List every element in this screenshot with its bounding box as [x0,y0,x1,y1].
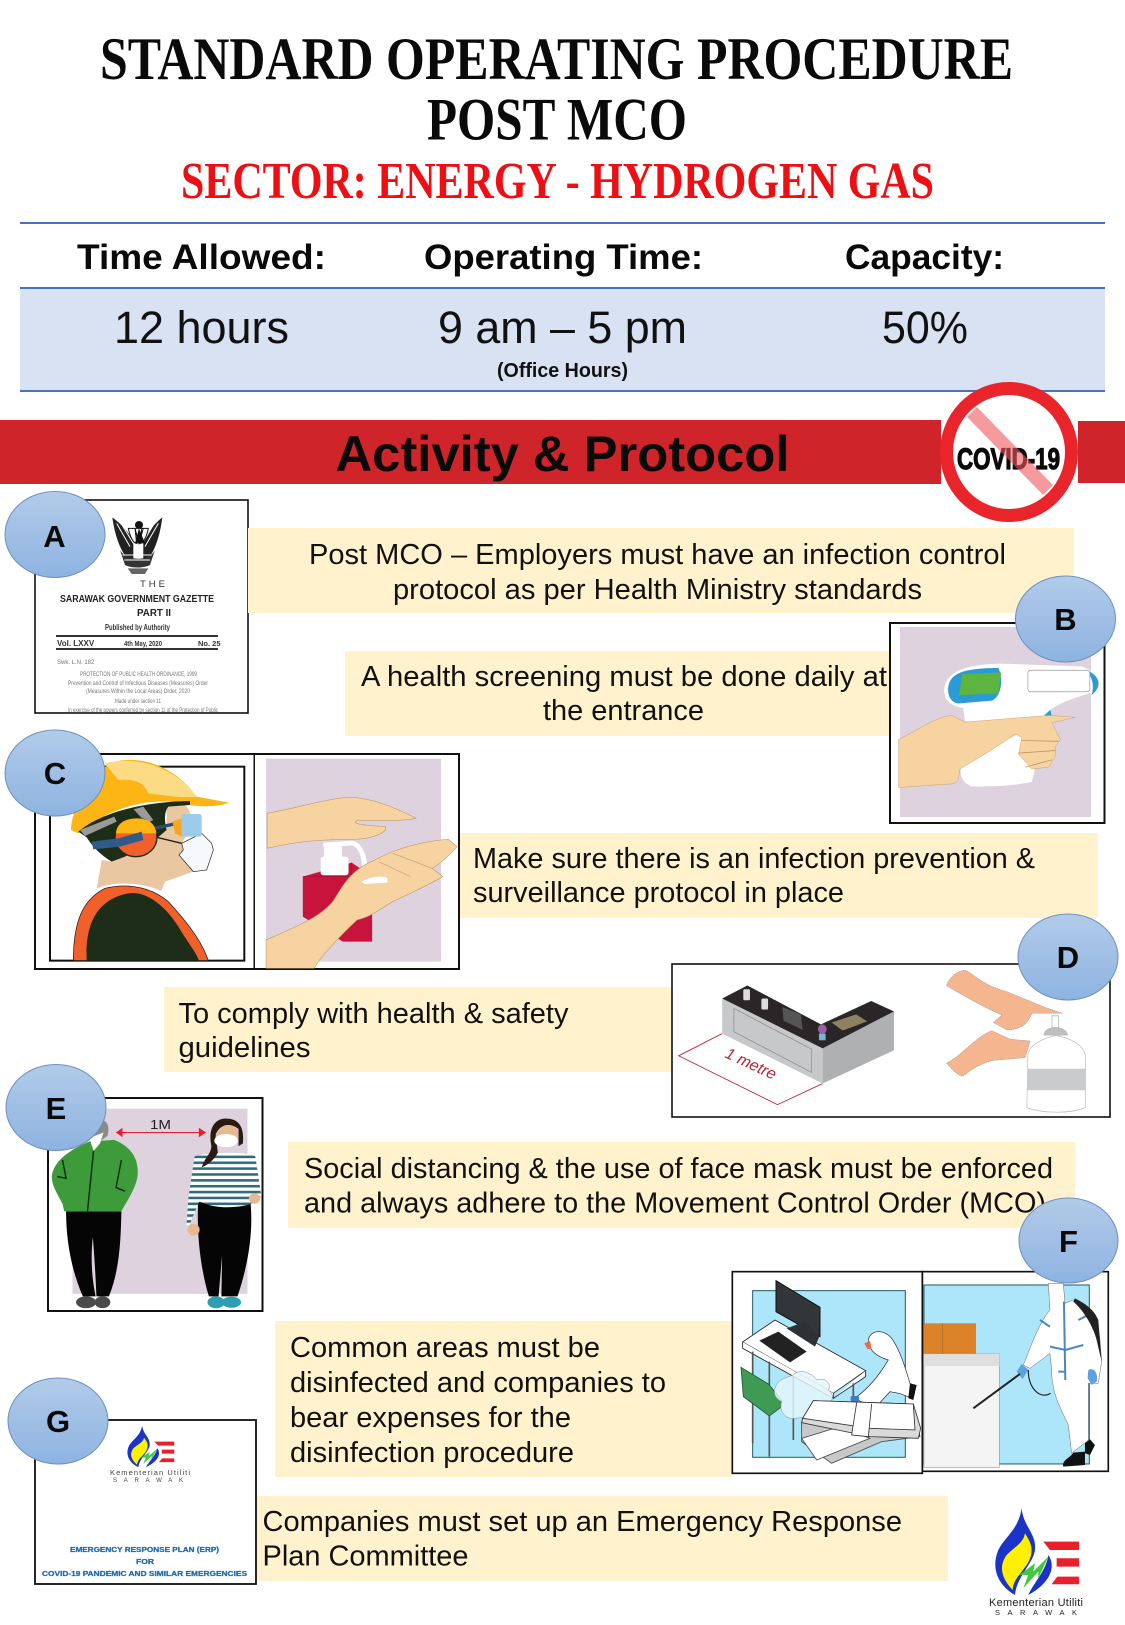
left scene [753,1291,905,1457]
badge F [1019,1198,1118,1283]
PPE and sanitiser images [35,754,459,969]
info table [20,222,1105,392]
badge C [5,730,105,816]
badge D [1018,914,1118,1000]
ERP cover image: SARAWAK [113,1478,183,1484]
text block F: disinfection procedure [290,1437,574,1469]
disinfection images [732,1272,1108,1473]
text block A: Post MCO – Employers must have an infection control [309,539,1006,571]
badge E [6,1064,106,1150]
gazette document image: Swk. L.N. 182 [57,660,95,666]
gazette document image: No. 25 [198,639,221,648]
ERP cover image [35,1420,256,1584]
info table: Capacity: [845,238,1004,277]
text block B: A health screening must be done daily at [361,661,887,693]
ERP cover image: COVID-19 PANDEMIC AND SIMILAR EMERGENCIES [42,1571,247,1578]
gazette document image: THE [140,579,168,590]
worker illustration [50,760,244,961]
logo: Kementerian Utiliti Sarawak [989,1508,1083,1617]
text block C: surveillance protocol in place [473,877,844,909]
logo: Kementerian Utiliti Sarawak: Kementerian Utiliti [989,1597,1083,1609]
gazette document image: (Measures Within the Local Areas) Order, 2020 [86,689,191,695]
panel C: PPE and sanitiser [5,730,1098,969]
thermometer image [890,623,1104,823]
emblem [112,517,162,574]
text block F: Common areas must be [290,1332,600,1364]
gazette document image: Prevention and Control of Infectious Diseases (Measures) Order [68,681,208,687]
text block D [164,987,672,1072]
panel D: health and safety [164,914,1118,1117]
gazette document image: 4th May, 2020 [124,639,162,648]
gazette document image: Made under section 11 [115,699,161,705]
gazette document image: SARAWAK GOVERNMENT GAZETTE [60,593,214,605]
text block E: and always adhere to the Movement Control Order (MCO) [304,1188,1046,1220]
text block A: protocol as per Health Ministry standards [393,574,922,606]
text block C [460,833,1098,918]
logo: Kementerian Utiliti Sarawak: SARAWAK [995,1608,1077,1617]
text block G [257,1496,948,1581]
badge C: C [44,756,66,791]
text block D: guidelines [178,1032,310,1064]
panel G: emergency response plan [8,1378,948,1584]
text block F: disinfected and companies to [290,1367,666,1399]
text block E: Social distancing & the use of face mask must be enforced [304,1153,1053,1185]
text block C: Make sure there is an infection prevention & [473,843,1035,875]
info table: Time Allowed: [77,238,326,277]
info table: (Office Hours) [497,360,628,382]
badge B: B [1054,602,1077,637]
gazette document image: Published by Authority [105,623,170,632]
subtitle: sector: SECTOR: ENERGY - HYDROGEN GAS [181,153,934,210]
man [66,1211,121,1296]
gazette document image: PART II [137,607,171,619]
woman [198,1202,251,1296]
panel E: social distancing [6,1064,1075,1311]
info table: 50% [882,302,968,353]
section banner [0,420,1125,484]
badge A [5,492,105,578]
badge G: G [46,1404,70,1439]
badge G [8,1378,108,1464]
badge E: E [46,1091,66,1126]
text block G: Plan Committee [262,1540,468,1572]
sanitiser illustration [266,759,457,968]
info table: Operating Time: [424,238,703,277]
text block D: To comply with health & safety [178,998,569,1030]
badge B [1016,576,1116,662]
counter and hand wash image: 1 metre [722,1045,779,1084]
right scene [924,1285,1089,1464]
info table: 12 hours [114,302,289,353]
social distancing image: 1M [150,1117,171,1132]
text block F: bear expenses for the [290,1402,571,1434]
text block A [248,528,1074,613]
badge A: A [43,519,66,554]
section banner: Activity & Protocol [336,426,790,482]
panel F: disinfection [275,1198,1118,1477]
text block G: Companies must set up an Emergency Response [262,1506,902,1538]
panel A: gazette [5,492,1074,714]
text block E [288,1142,1075,1228]
info table: 9 am – 5 pm [438,302,687,353]
badge F: F [1059,1224,1078,1259]
panel B: temperature screening [345,576,1116,823]
badge D: D [1057,940,1079,975]
icon: no covid sign [946,388,1072,516]
ERP cover image: EMERGENCY RESPONSE PLAN (ERP) [70,1547,219,1554]
title: POST MCO [427,86,687,152]
gazette document image: PROTECTION OF PUBLIC HEALTH ORDINANCE, 1999 [80,672,198,678]
small ministry logo [127,1426,174,1467]
gazette document image: Vol. LXXV [57,639,95,648]
text block B [345,651,890,736]
ERP cover image: Kementerian Utiliti [110,1468,190,1477]
title [100,26,1013,152]
icon: no covid sign: COVID-19 [957,443,1060,476]
text block F [275,1321,733,1477]
social distancing image [48,1098,262,1311]
ERP cover image: FOR [136,1559,154,1566]
text block B: the entrance [543,695,704,727]
gazette document image [35,500,248,714]
gazette document image: In exercise of the powers conferred by section 11 of the Protection of Public [68,708,218,714]
counter and hand wash image [672,964,1110,1117]
